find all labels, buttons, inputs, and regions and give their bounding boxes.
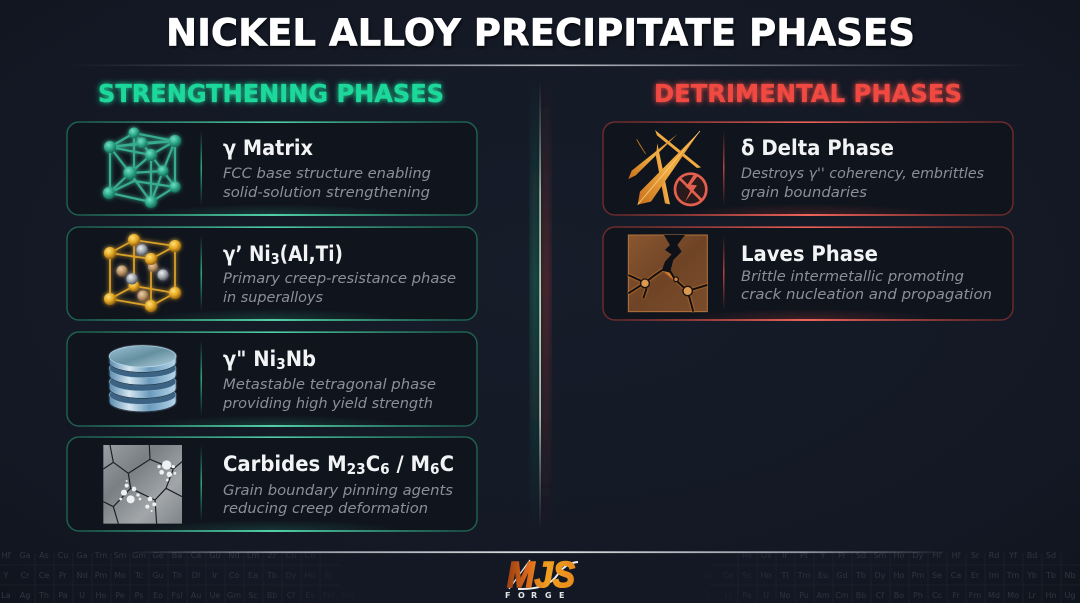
footer periodic table background: Bo: [894, 591, 904, 600]
icon: stacked discs: [109, 346, 176, 412]
footer periodic table background: Sc: [248, 591, 258, 600]
footer periodic table background: Dl: [192, 571, 200, 580]
logo: FORGE: [505, 591, 564, 600]
footer periodic table background: Ba: [172, 551, 182, 560]
footer periodic table background: Pr: [59, 571, 68, 580]
footer periodic table background: Os: [761, 551, 771, 560]
footer periodic table background: Tb: [1045, 571, 1056, 580]
card description: crack nucleation and propagation: [741, 287, 992, 303]
footer periodic table background: Pu: [799, 591, 809, 600]
footer periodic table background: Gm: [227, 591, 241, 600]
footer periodic table background: Gd: [836, 571, 848, 580]
footer periodic table background: Hf: [933, 551, 942, 560]
card title: Carbides M: [223, 452, 358, 477]
footer periodic table background: Tb: [266, 571, 277, 580]
footer periodic table background: Ho: [894, 551, 905, 560]
logo: MJS: [507, 554, 575, 595]
footer periodic table background: In: [705, 571, 713, 580]
footer periodic table background: Rd: [989, 551, 999, 560]
icon: cracked bronze block: [628, 235, 707, 312]
card description: [223, 483, 453, 517]
heading: strengthening phases: STRENGTHENING PHASES: [98, 79, 444, 108]
footer periodic table background: Ag: [20, 591, 30, 600]
footer periodic table background: Cm: [835, 591, 849, 600]
icon: delta needles with prohibition sign: [628, 130, 706, 205]
footer periodic table background: Am: [816, 591, 830, 600]
footer periodic table background: Tl: [780, 571, 789, 580]
footer periodic table background: Lr: [1028, 591, 1037, 600]
footer periodic table background: Hf: [2, 551, 11, 560]
footer periodic table background: No: [780, 591, 791, 600]
footer periodic table background: U: [763, 591, 769, 600]
card title: C: [366, 452, 380, 477]
footer periodic table background: Sc: [742, 571, 752, 580]
footer periodic table background: Tm: [1006, 571, 1020, 580]
footer periodic table background: Ca: [191, 551, 201, 560]
card title: 6: [380, 460, 390, 478]
card title: γ’ Ni: [223, 242, 279, 267]
card title: Nb: [286, 347, 316, 372]
card title: δ Delta Phase: [741, 136, 894, 161]
footer periodic table background: Cf: [287, 591, 295, 600]
footer periodic table background: Bd: [1027, 551, 1037, 560]
card description: Destroys γ'' coherency, embrittles: [741, 166, 984, 182]
footer periodic table background: Ug: [1065, 591, 1075, 600]
footer periodic table background: Hn: [1045, 591, 1057, 600]
footer periodic table background: Ho: [96, 591, 107, 600]
footer periodic table background: Ho: [305, 571, 316, 580]
footer periodic table background: Y: [3, 571, 9, 580]
card title: C: [440, 452, 454, 477]
footer periodic table background: Md: [988, 591, 1000, 600]
card title: (Al,Ti): [280, 242, 343, 267]
card title: 3: [276, 355, 286, 373]
footer periodic table background: Ue: [210, 591, 220, 600]
card description: [741, 166, 984, 201]
footer periodic table background: Er: [325, 571, 334, 580]
panel: gamma double prime: [67, 332, 477, 427]
footer periodic table background: Ps: [135, 591, 143, 600]
footer periodic table background: Mo: [114, 571, 126, 580]
footer periodic table background: Ir: [212, 571, 219, 580]
footer periodic table background: Au: [191, 591, 201, 600]
panel: gamma prime: [67, 226, 477, 321]
card description: [222, 377, 436, 412]
footer periodic table background: Y: [820, 551, 826, 560]
card title: 23: [347, 460, 366, 478]
footer periodic table background: Nd: [228, 551, 240, 560]
footer periodic table background: Gm: [132, 551, 146, 560]
footer periodic table background: Dy: [875, 571, 886, 580]
footer periodic table background: Sm: [874, 551, 887, 560]
footer periodic table background: Nb: [1064, 571, 1076, 580]
card title: γ" Ni: [223, 347, 282, 372]
footer periodic table background: Md: [342, 591, 354, 600]
footer periodic table background: Cc: [932, 591, 942, 600]
footer periodic table background: Ho: [761, 571, 772, 580]
footer periodic table background: Ga: [19, 551, 31, 560]
footer periodic table background: Th: [171, 571, 182, 580]
footer periodic table background: Ir: [706, 591, 713, 600]
footer periodic table background: Yf: [1008, 551, 1017, 560]
card title: Laves Phase: [741, 242, 878, 267]
card title: 3: [271, 250, 280, 268]
center divider: [530, 80, 551, 530]
footer periodic table background: Ce: [723, 571, 733, 580]
footer periodic table background: Ga: [76, 551, 88, 560]
footer periodic table background: Yb: [1026, 571, 1037, 580]
footer periodic table background: Mo: [1007, 591, 1019, 600]
card description: FCC base structure enabling: [223, 166, 431, 182]
footer periodic table background: Cr: [21, 571, 30, 580]
footer periodic table background: U: [79, 591, 85, 600]
footer periodic table background: Gu: [209, 551, 221, 560]
footer periodic table background: Fm: [323, 591, 335, 600]
footer periodic table background: Tc: [134, 571, 143, 580]
icon: teal FCC lattice: [103, 128, 181, 208]
panel: delta phase: [603, 122, 1013, 216]
footer periodic table background: Eu: [818, 571, 828, 580]
footer periodic table background: Sd: [1046, 551, 1056, 560]
card title: 6: [430, 460, 440, 478]
footer periodic table background: Co: [229, 571, 239, 580]
footer periodic table background: Cf: [876, 591, 884, 600]
footer periodic table background: Pm: [95, 571, 108, 580]
footer periodic table background: Zr: [268, 551, 277, 560]
footer periodic table background: La: [1, 591, 11, 600]
footer periodic table background: Li: [725, 591, 731, 600]
footer periodic table background: Sr: [971, 551, 980, 560]
footer periodic table background: Pt: [800, 551, 808, 560]
footer periodic table background: Ca: [951, 571, 961, 580]
footer periodic table background: Cu: [305, 551, 315, 560]
footer periodic table background: Th: [38, 591, 49, 600]
footer periodic table background: Im: [989, 571, 999, 580]
footer periodic table background: Fsl: [172, 591, 182, 600]
footer periodic table background: As: [39, 551, 49, 560]
footer periodic table background: Bb: [856, 591, 866, 600]
footer periodic table background: Hf: [952, 551, 961, 560]
footer periodic table background: Gu: [152, 571, 164, 580]
footer periodic table background: Bb: [267, 591, 277, 600]
card description: Metastable tetragonal phase: [223, 377, 436, 393]
footer periodic table background: Dy: [913, 551, 924, 560]
card description: Brittle intermetallic promoting: [741, 269, 964, 285]
card description: Primary creep-resistance phase: [223, 271, 456, 287]
footer periodic table background: Pa: [58, 591, 68, 600]
icon: gold cubic lattice: [104, 234, 181, 312]
footer periodic table background: Eo: [153, 591, 163, 600]
footer periodic table background: Cu: [286, 551, 296, 560]
card description: solid-solution strengthening: [223, 185, 430, 201]
card description: providing high yield strength: [222, 396, 433, 412]
title: NICKEL ALLOY PRECIPITATE PHASES: [166, 10, 915, 54]
heading: detrimental phases: DETRIMENTAL PHASES: [654, 79, 962, 108]
footer periodic table background: Tb: [855, 571, 866, 580]
footer periodic table background: Es: [305, 591, 315, 600]
footer periodic table background: Ho: [894, 571, 905, 580]
card description: Grain boundary pinning agents: [223, 483, 453, 499]
footer periodic table background: Pr: [838, 551, 847, 560]
footer periodic table background: Ce: [39, 571, 49, 580]
footer periodic table background: Pa: [742, 591, 752, 600]
footer periodic table background: [0, 551, 1080, 603]
footer periodic table background: Dy: [286, 571, 297, 580]
footer periodic table background: Cu: [58, 551, 68, 560]
card description: [741, 269, 992, 303]
footer periodic table background: Pe: [115, 591, 125, 600]
panel: laves phase: [603, 226, 1013, 321]
card title: / M: [390, 452, 430, 477]
icon: grain boundary micrograph: [103, 445, 182, 524]
footer periodic table background: Sd: [856, 551, 866, 560]
card description: [223, 166, 431, 201]
footer periodic table background: Fm: [969, 591, 981, 600]
footer periodic table background: Se: [932, 571, 942, 580]
footer periodic table background: Fr: [952, 591, 960, 600]
card title: γ Matrix: [223, 136, 313, 161]
footer periodic table background: Tm: [797, 571, 811, 580]
card description: grain boundaries: [741, 185, 867, 201]
footer periodic table background: Ir: [782, 551, 789, 560]
card description: [223, 271, 456, 306]
card description: in superalloys: [223, 290, 323, 306]
footer periodic table background: Pm: [912, 571, 925, 580]
footer periodic table background: Ea: [248, 571, 258, 580]
footer periodic table background: Lm: [247, 551, 259, 560]
footer periodic table background: Ge: [152, 551, 164, 560]
panel: carbides: [67, 436, 477, 532]
footer periodic table background: Sm: [114, 551, 127, 560]
footer periodic table background: Er: [971, 571, 980, 580]
footer periodic table background: Nd: [76, 571, 88, 580]
footer periodic table background: Ph: [913, 591, 923, 600]
panel: gamma matrix: [67, 122, 477, 216]
card description: reducing creep deformation: [223, 501, 428, 517]
footer periodic table background: Tm: [94, 551, 108, 560]
footer periodic table background: Re: [742, 551, 752, 560]
